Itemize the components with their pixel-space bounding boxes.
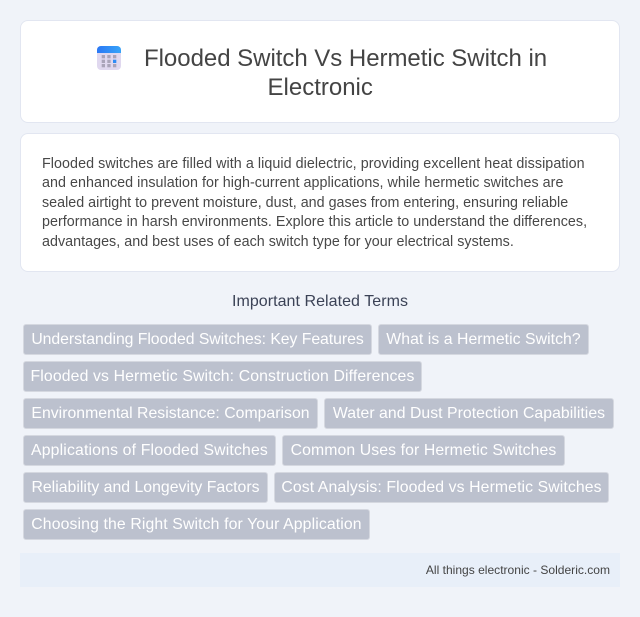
tag: What is a Hermetic Switch?	[386, 331, 581, 348]
tag	[23, 398, 318, 429]
description text: advantages, and best uses of each switch type for your electrical systems.	[42, 234, 514, 250]
tag	[23, 324, 372, 355]
footer bar	[20, 553, 620, 587]
tag	[274, 472, 609, 503]
tag: Choosing the Right Switch for Your Application	[31, 516, 362, 533]
tag: Environmental Resistance: Comparison	[31, 405, 310, 422]
tag	[23, 509, 370, 540]
tag: Flooded vs Hermetic Switch: Construction Differences	[30, 368, 414, 385]
description text	[42, 156, 587, 250]
description text: and enhanced insulation for high-current applications, while hermetic switches are	[42, 175, 563, 191]
panel: title card	[20, 20, 620, 123]
tag	[23, 435, 276, 466]
tag	[378, 324, 589, 355]
tag list	[23, 324, 614, 540]
tag: Reliability and Longevity Factors	[31, 479, 260, 496]
description text: sealed airtight to prevent moisture, dust, and gases from entering, ensuring reliable	[42, 195, 568, 211]
tag	[324, 398, 614, 429]
tag: Applications of Flooded Switches	[31, 442, 268, 459]
tag	[282, 435, 565, 466]
description text: performance in harsh environments. Explore this article to understand the differences,	[42, 214, 587, 230]
description text: Flooded switches are filled with a liquid dielectric, providing excellent heat dissipation	[42, 156, 585, 172]
footer text: All things electronic - Solderic.com	[426, 563, 610, 577]
icon: calendar	[97, 46, 121, 70]
tag	[23, 472, 268, 503]
tag: Cost Analysis: Flooded vs Hermetic Switches	[281, 479, 602, 496]
tag: Common Uses for Hermetic Switches	[291, 442, 556, 459]
heading: important related terms: Important Related Terms	[232, 293, 408, 310]
tag: Water and Dust Protection Capabilities	[333, 405, 605, 422]
title: Flooded Switch Vs Hermetic Switch in	[144, 45, 547, 72]
tag: Understanding Flooded Switches: Key Features	[31, 331, 364, 348]
title	[144, 45, 547, 101]
tag	[23, 361, 422, 392]
title: Electronic	[268, 74, 373, 101]
panel: description card	[20, 133, 620, 272]
